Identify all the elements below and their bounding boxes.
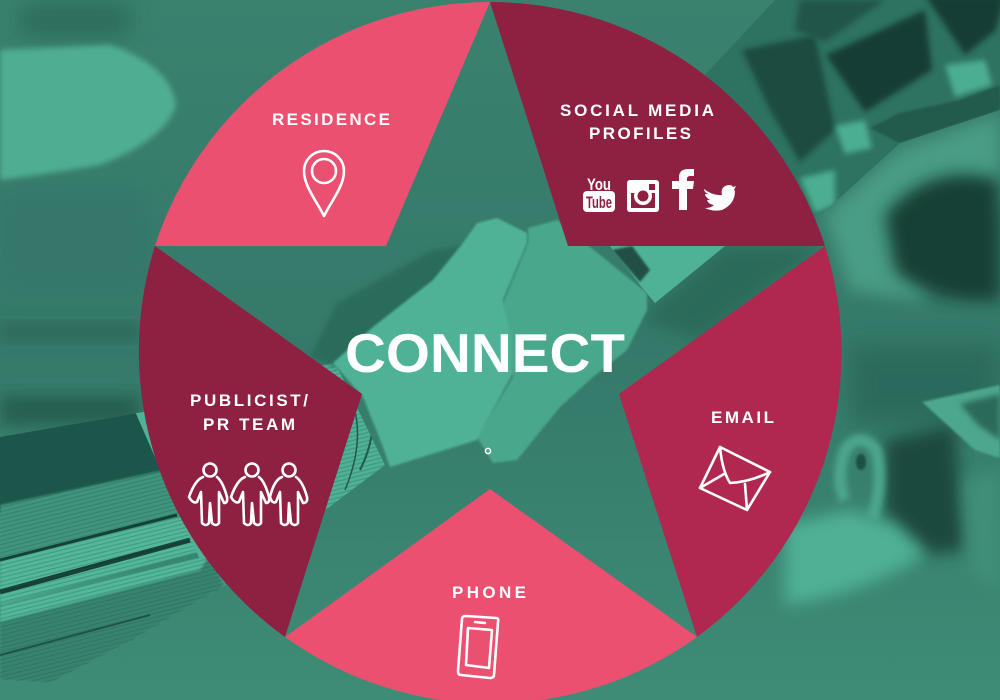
label: social media profiles: SOCIAL MEDIA: [560, 101, 714, 120]
icon: twitter: [704, 185, 736, 211]
label: social media profiles: [560, 101, 714, 143]
icon: smartphone: [458, 616, 498, 678]
icon: location pin: [304, 151, 344, 216]
label: publicist / PR team: PR TEAM: [203, 415, 295, 434]
icon: instagram: [627, 180, 659, 212]
blurred objects: right side: [850, 345, 1000, 425]
icon: facebook: [672, 169, 694, 210]
label: phone: PHONE: [452, 583, 526, 602]
label: social media profiles: PROFILES: [589, 124, 691, 143]
label: email: EMAIL: [711, 408, 774, 427]
icon: three people: [189, 464, 307, 525]
hand: left: [333, 218, 527, 467]
icon: youtube: Tube: [586, 193, 612, 212]
title: connect: CONNECT: [345, 322, 625, 384]
hand: right: [477, 220, 647, 463]
icon: envelope: [700, 447, 770, 510]
label: residence: RESIDENCE: [272, 110, 390, 129]
blurred object: upper left: [0, 45, 176, 180]
label: publicist / PR team: PUBLICIST/: [190, 391, 308, 410]
panel: phone: [285, 489, 697, 700]
panel: residence: [155, 2, 490, 246]
label: publicist / PR team: [190, 391, 308, 434]
panel: publicist / PR team: [139, 246, 362, 637]
panel: email: [619, 246, 842, 637]
saucer and cup: [785, 510, 925, 605]
star interior shadow: right: [640, 246, 825, 340]
hand: shadow: [310, 245, 465, 370]
panel: social media profiles: [490, 2, 825, 246]
icon: youtube: You: [587, 175, 611, 194]
sleeve: bottom left: [0, 363, 385, 682]
sleeve: top right: [600, 0, 1000, 320]
icon: youtube: [583, 175, 615, 212]
